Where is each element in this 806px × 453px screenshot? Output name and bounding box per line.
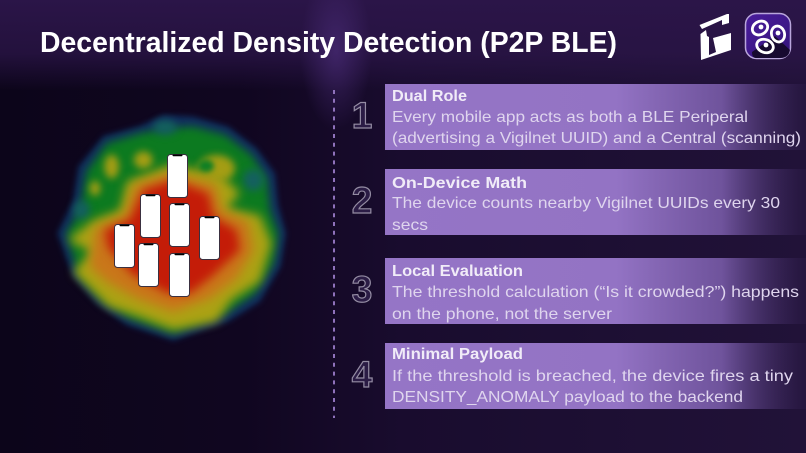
heatmap: green zone <box>67 127 278 333</box>
card 3 <box>385 258 806 324</box>
heading: On-Device Math: On-Device Math <box>392 175 527 192</box>
body 1: (advertising a Vigilnet UUID) and a Central (scanning) <box>392 130 801 147</box>
body 3: The threshold calculation (“Is it crowded?”) happens <box>392 284 799 301</box>
card 2 <box>385 169 806 235</box>
logo: G mark <box>700 14 731 60</box>
number 4: 4 <box>352 354 373 395</box>
phone 7 <box>170 254 190 296</box>
body 4: DENSITY_ANOMALY payload to the backend <box>392 389 743 406</box>
phone 5 <box>114 224 134 268</box>
heatmap: yellow zone <box>68 165 272 330</box>
heatmap: red core <box>105 180 240 293</box>
step 2 <box>352 169 806 235</box>
heatmap: teal patches <box>74 120 263 219</box>
number 1: 1 <box>352 95 372 136</box>
body 3: on the phone, not the server <box>392 306 613 323</box>
heatmap: green hollow <box>198 160 214 172</box>
heatmap: blue edge <box>57 115 286 341</box>
heading: Dual Role: Dual Role <box>392 88 467 105</box>
body 1: Every mobile app acts as both a BLE Periperal <box>392 109 748 126</box>
heading: Local Evaluation: Local Evaluation <box>392 263 523 280</box>
logo: app icon <box>746 14 790 58</box>
body 2: secs <box>392 217 428 234</box>
step 1 <box>352 84 806 150</box>
title: Decentralized Density Detection (P2P BLE) <box>40 27 617 59</box>
phone 1 <box>168 154 188 198</box>
number 3: 3 <box>352 269 372 310</box>
body 2: The device counts nearby Vigilnet UUIDs every 30 <box>392 195 780 212</box>
heading: Minimal Payload: Minimal Payload <box>392 346 523 363</box>
number 2: 2 <box>352 180 372 221</box>
heatmap <box>57 115 286 341</box>
phone 6 <box>138 244 158 286</box>
heatmap: yellow spots <box>90 151 235 196</box>
phone 4 <box>200 216 220 260</box>
card 1 <box>385 84 806 150</box>
step 3 <box>352 258 806 324</box>
phone 2 <box>140 194 160 238</box>
card 4 <box>385 343 806 409</box>
body 4: If the threshold is breached, the device fires a tiny <box>392 368 793 385</box>
phone 3 <box>170 204 190 246</box>
step 4 <box>352 343 806 409</box>
heatmap: orange zone <box>90 173 253 312</box>
